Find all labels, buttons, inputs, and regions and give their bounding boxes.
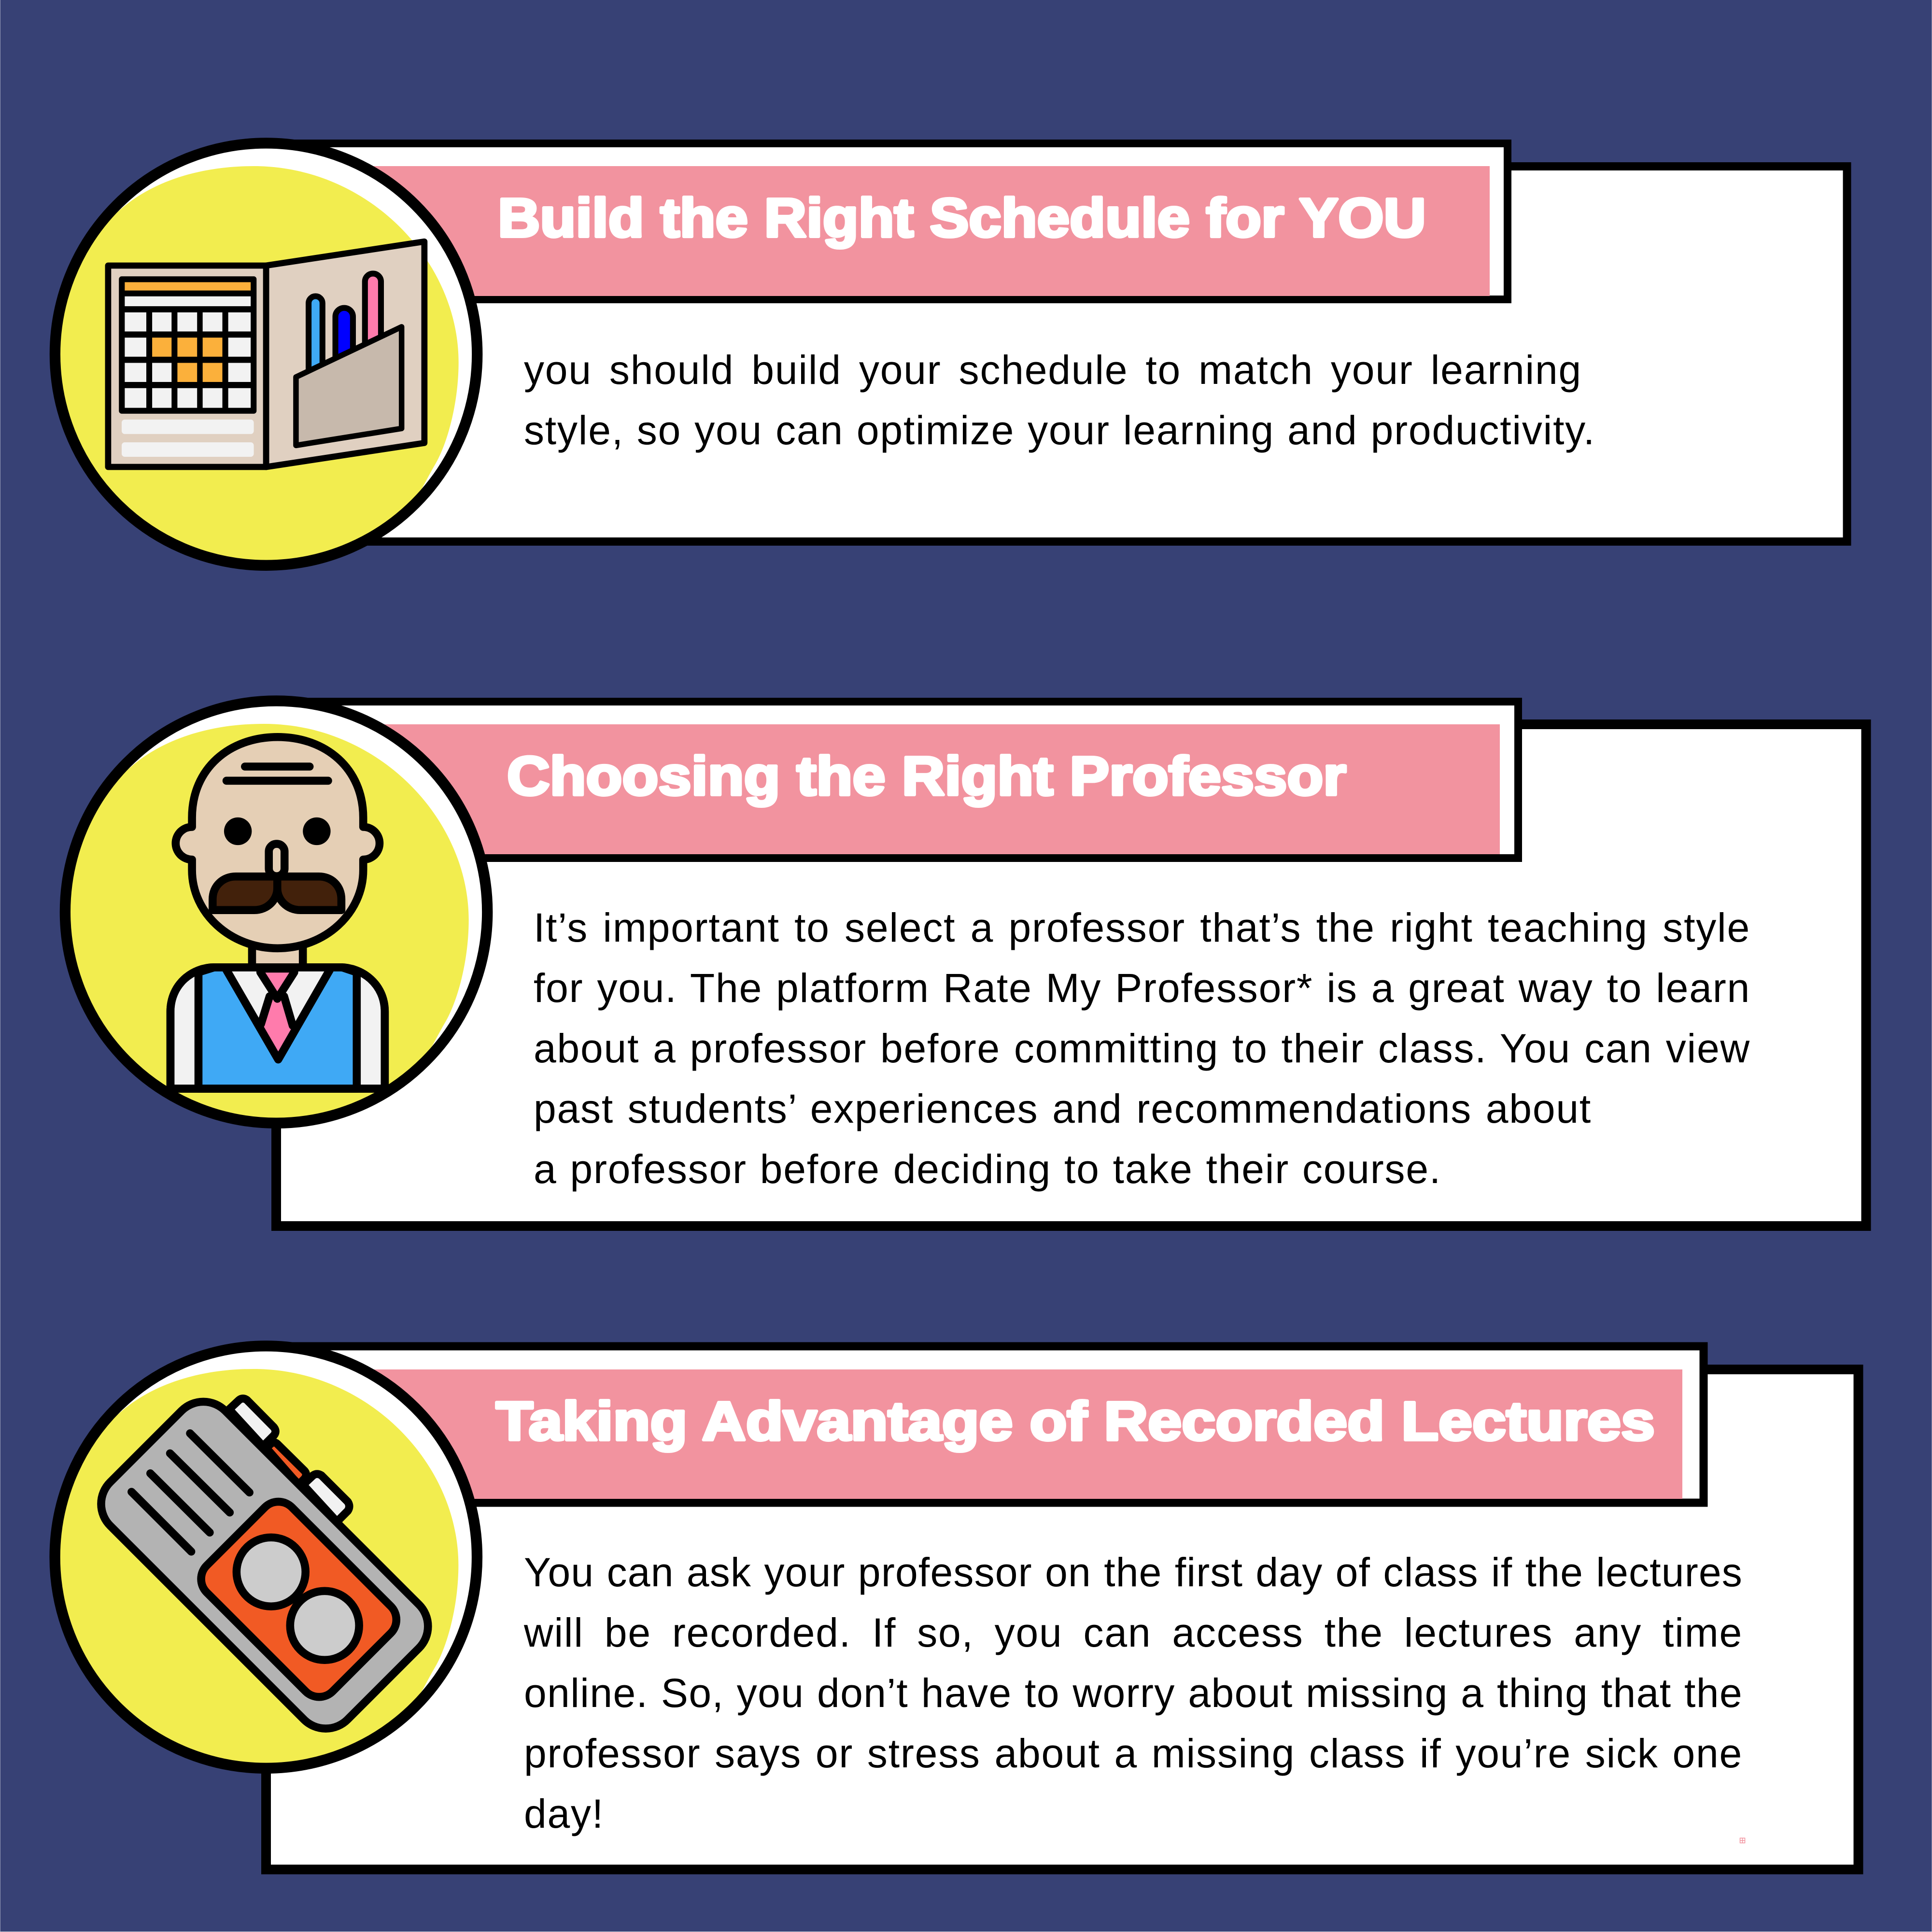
heading 2: Choosing the Right Professor [507, 746, 1346, 806]
badge circle 2 [65, 701, 487, 1123]
title banner 2 [299, 702, 1518, 858]
body text 3 [524, 1542, 1760, 1844]
icon: overflow marker [1740, 1838, 1745, 1843]
body text 3: professor says or stress about a missing class if you’re sick one [524, 1731, 1743, 1776]
body card 1 [290, 166, 1847, 542]
body text 3: day! [524, 1791, 604, 1836]
body text 2: It’s important to select a professor that’s the right teaching style [534, 905, 1750, 950]
body text 2: for you. The platform Rate My Professor* is a great way to learn [534, 965, 1750, 1011]
title banner 1 [290, 143, 1508, 299]
body text 1: style, so you can optimize your learning and productivity. [524, 408, 1595, 453]
heading 3: Taking Advantage of Recorded Lectures [496, 1391, 1655, 1452]
title banner 3 [290, 1346, 1704, 1503]
body text 3: You can ask your professor on the first day of class if the lectures [524, 1550, 1743, 1595]
body text 3: online. So, you don’t have to worry about missing a thing that the [524, 1670, 1743, 1716]
panel: taking advantage of recorded lectures [55, 1346, 1858, 1870]
body card 3 [266, 1369, 1858, 1870]
body text 2: a professor before deciding to take their course. [534, 1146, 1441, 1192]
body text 2: past students’ experiences and recommendations about [534, 1086, 1592, 1131]
badge circle 1 [55, 143, 477, 565]
badge circle 3 [55, 1346, 477, 1768]
icon: planner with pens [108, 241, 424, 467]
panel: build the right schedule [55, 143, 1847, 565]
body text 3: will be recorded. If so, you can access the lectures any time [524, 1610, 1743, 1655]
panel: choosing the right professor [65, 701, 1866, 1226]
body text 1: you should build your schedule to match your learning [524, 347, 1582, 393]
body card 2 [276, 724, 1866, 1226]
icon: voice recorder [88, 1389, 441, 1741]
heading 1: Build the Right Schedule for YOU [498, 187, 1426, 248]
icon: bald professor with moustache [170, 737, 385, 1089]
body text 1 [524, 340, 1606, 461]
body text 2: about a professor before committing to their class. You can view [534, 1026, 1750, 1071]
body text 2 [534, 898, 1770, 1199]
